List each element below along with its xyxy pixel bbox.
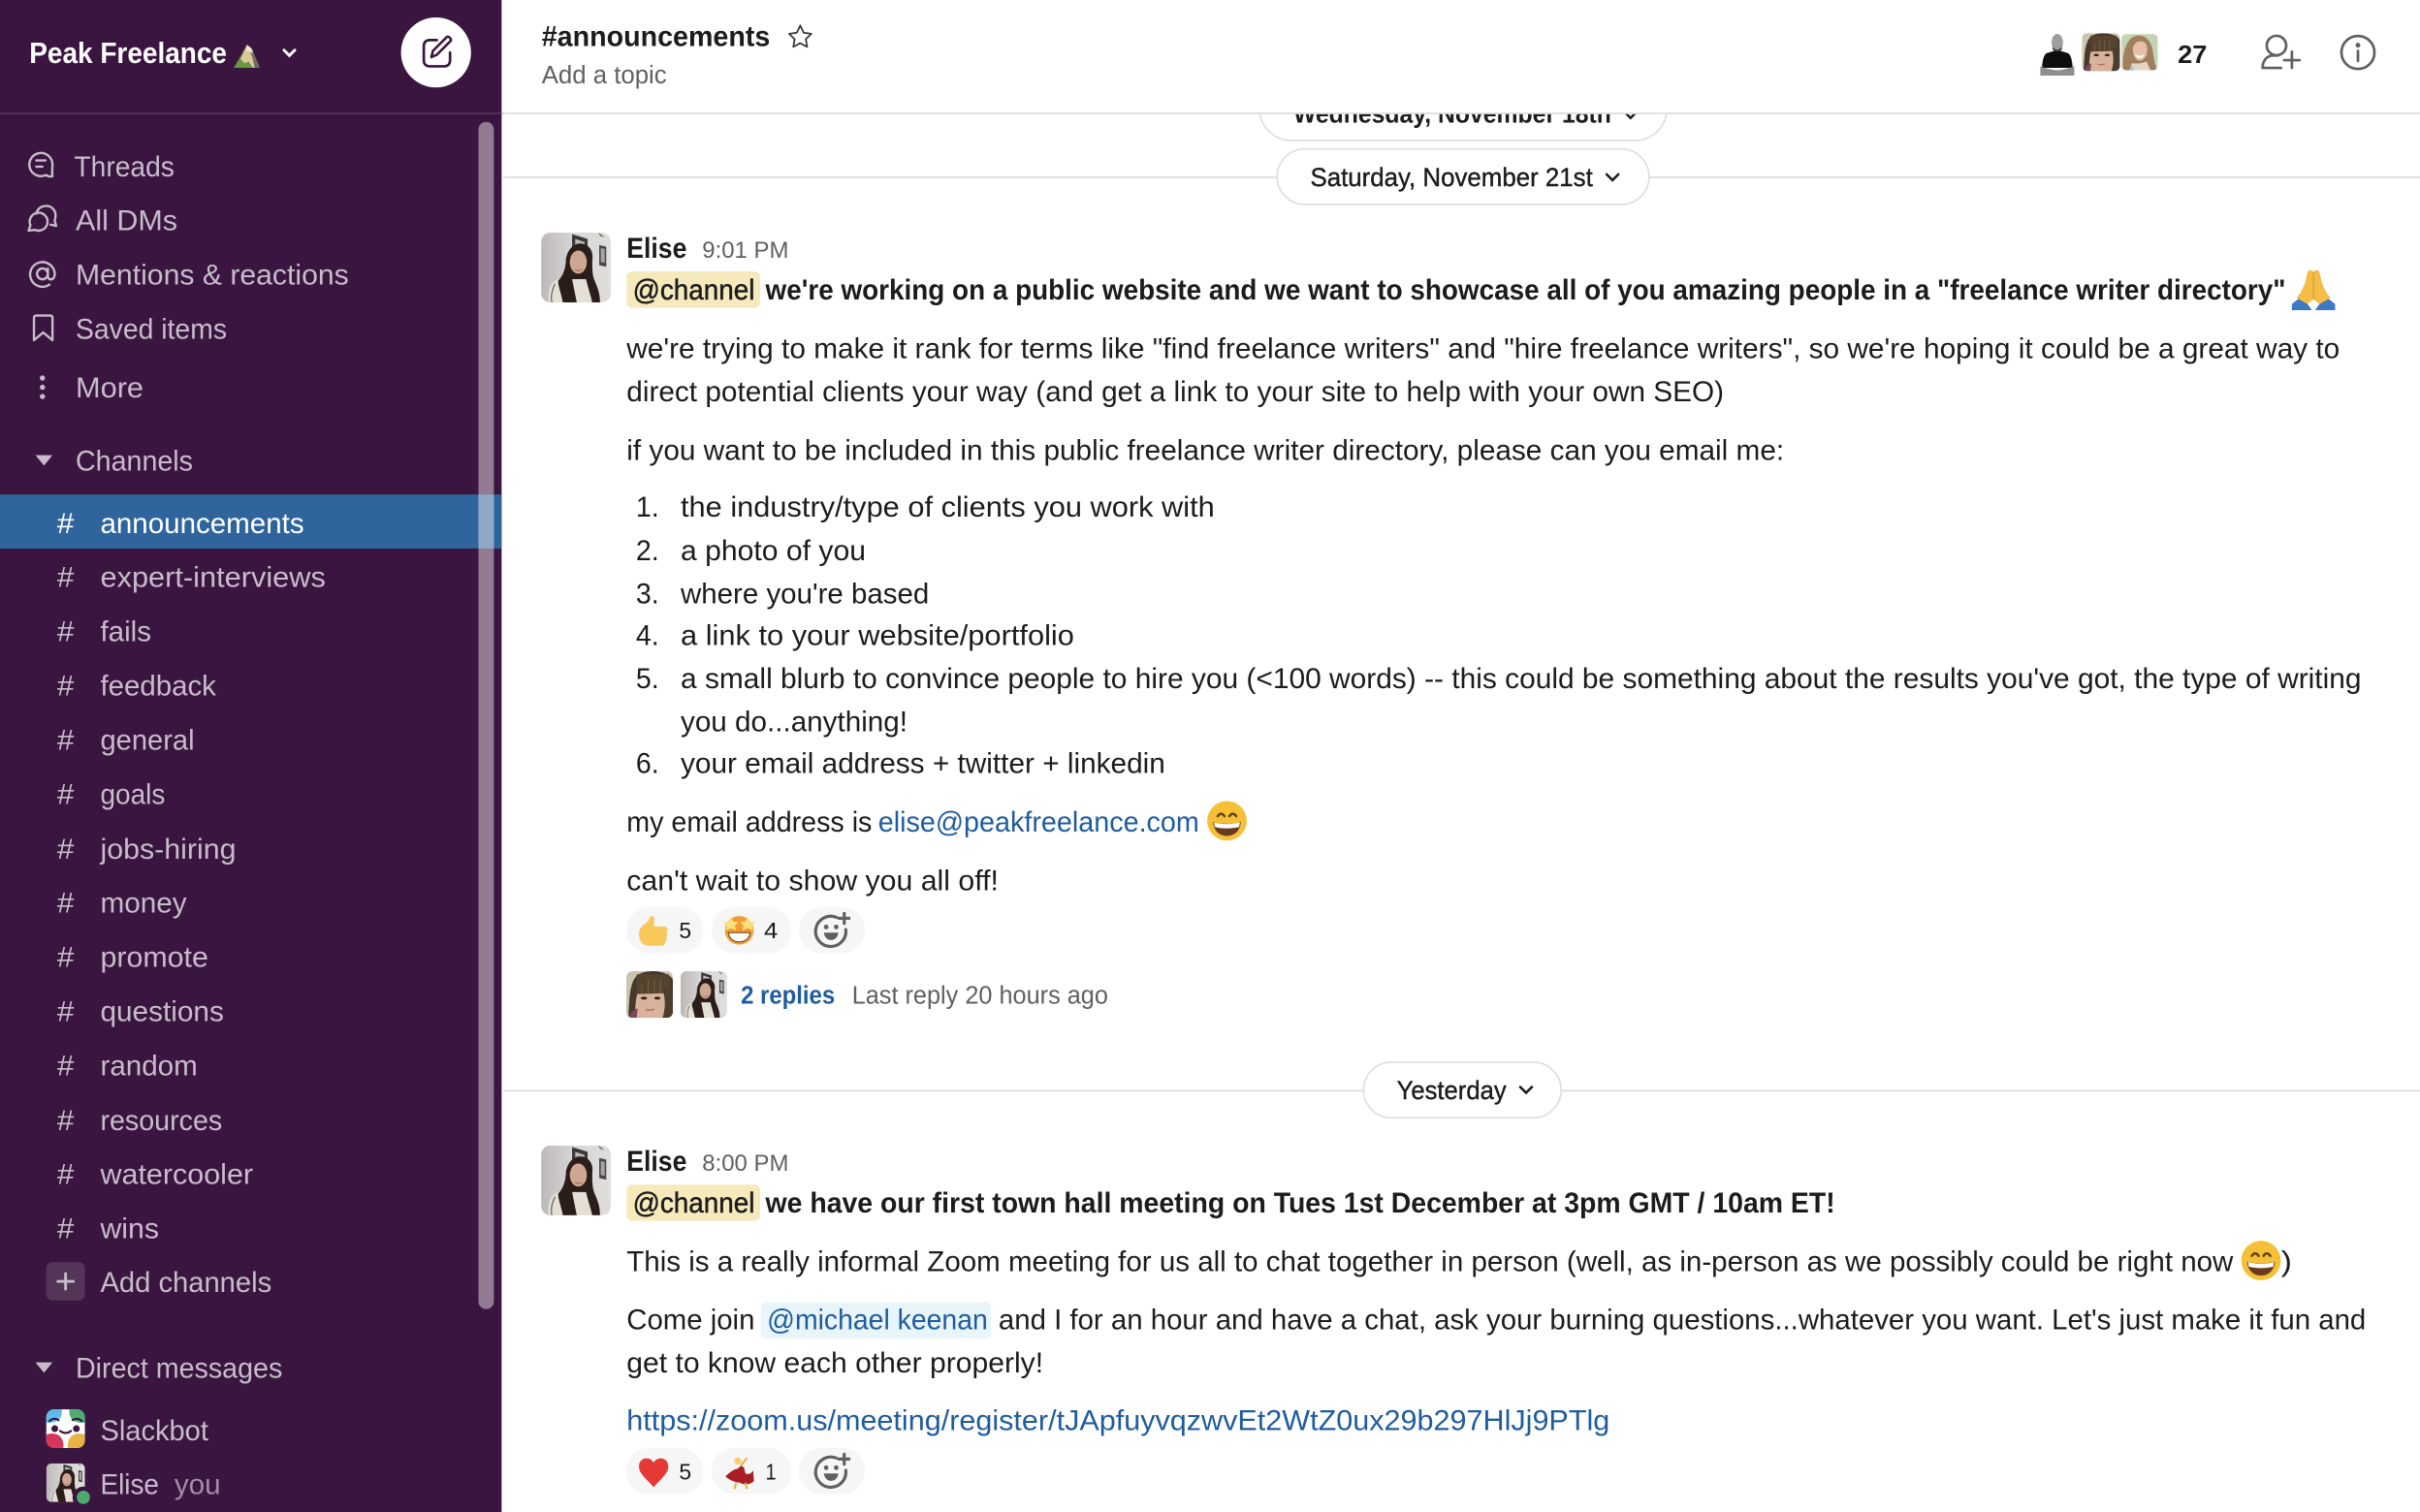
paragraph: come join: and I for an hour and have a chat, ask your burning questions...whatever you want. Let's just make it fun and [999,1304,2366,1336]
channel list: # [57,562,75,594]
author and time: 9:01 PM [702,237,788,264]
date divider: Yesterday [503,1062,2420,1118]
numbered list: a photo of you [681,535,866,567]
member avatars [2040,33,2158,76]
DM: elise: you [175,1469,221,1501]
thread replies [626,971,1108,1018]
zoom link: https://zoom.us/meeting/register/tJApfuyvqzwvEt2WtZ0ux29b297HlJj9PTlg [626,1405,1609,1437]
reaction: thumbs up [626,907,704,954]
paragraph: request: if you want to be included in this public freelance writer directory, please can you email me: [626,434,1784,466]
paragraph: zoom meeting: This is a really informal Zoom meeting for us all to chat together in person (well, as in-person as we possibly could be right now [626,1246,2234,1278]
channel list: # [57,1051,75,1083]
avatar: Elise [541,233,611,302]
channel list: wins [99,1213,159,1244]
numbered list: you do...anything! [681,707,908,739]
thread replies: Last reply 20 hours ago [852,980,1108,1009]
numbered list [636,491,2362,780]
reaction: star struck: 4 [764,918,778,943]
email line: my email address is [626,806,872,838]
message 1 [541,233,2362,1018]
channel list [57,508,326,1244]
numbered list: a link to your website/portfolio [681,619,1074,651]
channel mention: @channel [633,1187,754,1219]
topic: Add a topic [542,60,667,89]
channel list: # [57,615,75,647]
paragraph: come join: Come join [626,1304,754,1336]
channel list: questions [100,995,224,1027]
nav: saved items: Saved items [76,313,227,345]
icon: add member [2263,36,2300,68]
channel list: # [57,508,75,540]
channel list: fails [100,615,151,647]
sidebar [0,0,501,1512]
add reaction [799,907,865,954]
numbered list: your email address + twitter + linkedin [681,748,1165,780]
add channels: Add channels [100,1267,271,1299]
reaction: dancer [712,1448,791,1495]
paragraph: come join: @michael keenan [767,1304,988,1336]
channel list: # [57,834,75,866]
author and time [626,233,788,265]
emoji: folded hands [2292,270,2335,310]
numbered list: 3. [636,578,659,610]
author and time: Elise [626,1146,686,1178]
channel list: promote [100,941,208,973]
channel list: # [57,995,75,1027]
channel list: # [57,941,75,973]
numbered list: 6. [636,748,659,780]
channel list: # [57,1159,75,1191]
compose button [401,17,471,87]
author and time: Elise [626,233,686,265]
paragraph: ranking [625,332,2340,408]
channel list: # [57,1105,75,1137]
author and time: 8:00 PM [702,1150,788,1177]
channel list: # [57,1213,75,1244]
message 2 [541,1146,2366,1495]
reactions [626,1448,865,1495]
DM: slackbot [47,1409,208,1448]
nav: all DMs [28,205,177,237]
paragraph: ranking: we're trying to make it rank for terms like "find freelance writers" and "hire freelance writers", so we're hoping it could be a great way to [625,332,2340,364]
channel list: # [57,778,75,810]
author and time [626,1146,788,1178]
channel list: expert-interviews [100,562,326,594]
section: channels: Channels [76,446,193,478]
channel list: goals [100,778,165,810]
add channels [47,1262,271,1301]
paragraph: come join [626,1303,2366,1379]
date divider: Saturday, November 21st: Saturday, November 21st [1310,163,1593,192]
numbered list: 2. [636,535,659,567]
numbered list: where you're based [680,578,929,610]
avatar: man in black t-shirt [2040,34,2074,76]
headline: we're working on a public website and we want to showcase all of you amazing people in a "freelance writer directory" [765,274,2286,306]
icon: workspace chevron [284,50,295,55]
nav: mentions: Mentions & reactions [76,260,349,292]
nav: threads [29,151,175,183]
icon: mountain emoji [234,45,260,68]
channel list: money [100,888,187,920]
nav: threads: Threads [74,151,175,183]
reaction: dancer: 1 [766,1460,777,1485]
date divider: Saturday, November 21st [503,149,2420,205]
icon: star [789,25,812,47]
DM: slackbot: Slackbot [100,1415,208,1447]
nav: more: More [76,372,143,404]
thread replies: 2 replies [741,980,835,1009]
selected channel row [0,494,501,549]
email line [626,801,1247,840]
paragraph: ranking: direct potential clients your way (and get a link to your site to help with your own SEO) [626,376,1724,408]
channel list: feedback [100,670,216,702]
channel list: resources [100,1105,222,1137]
channel list: # [57,670,75,702]
sign off: can't wait to show you all off! [626,865,999,897]
channel list: random [100,1051,198,1083]
channel list: # [57,725,75,757]
nav: more [40,372,143,404]
reactions [626,907,865,954]
channel name: #announcements [542,21,770,53]
channel list: general [100,725,195,757]
icon: info [2341,36,2374,69]
member count: 27 [2178,40,2207,69]
date divider: Wednesday, November 18th (clipped): Wednesday, November 18th [1293,100,1611,129]
reaction: heart: 5 [679,1460,691,1485]
reaction: star struck [712,907,791,954]
DM: elise: Elise [100,1469,159,1501]
numbered list: a small blurb to convince people to hire you (<100 words) -- this could be something about the results you've got, the type of writing [681,663,2362,695]
date divider: Wednesday, November 18th (clipped) [1259,78,1667,141]
add reaction [799,1448,865,1495]
email line: elise@peakfreelance.com [878,806,1199,838]
scrollbar [478,122,494,1309]
avatar: Elise [541,1146,611,1215]
channel list: jobs-hiring [99,834,237,866]
section: direct messages: Direct messages [76,1353,282,1385]
date divider: Yesterday: Yesterday [1397,1076,1507,1105]
channel list: announcements [100,508,304,540]
workspace name: Peak Freelance [29,38,227,70]
paragraph: zoom meeting: ) [2281,1246,2292,1278]
channel mention: @channel [633,274,754,306]
numbered list: 1. [636,491,659,523]
channel header [501,0,2420,113]
main message background [501,0,2420,1512]
numbered list: 4. [636,619,659,651]
channel list: # [57,888,75,920]
paragraph: come join: get to know each other properly! [626,1347,1043,1379]
DM: elise [47,1464,221,1508]
reaction: heart [626,1448,704,1495]
headline: we have our first town hall meeting on Tues 1st December at 3pm GMT / 10am ET! [765,1187,1835,1219]
numbered list: the industry/type of clients you work with [681,491,1215,523]
channel list: watercooler [99,1159,253,1191]
reaction: thumbs up: 5 [679,918,691,943]
numbered list: 5. [636,663,659,695]
nav: all DMs: All DMs [76,205,177,237]
